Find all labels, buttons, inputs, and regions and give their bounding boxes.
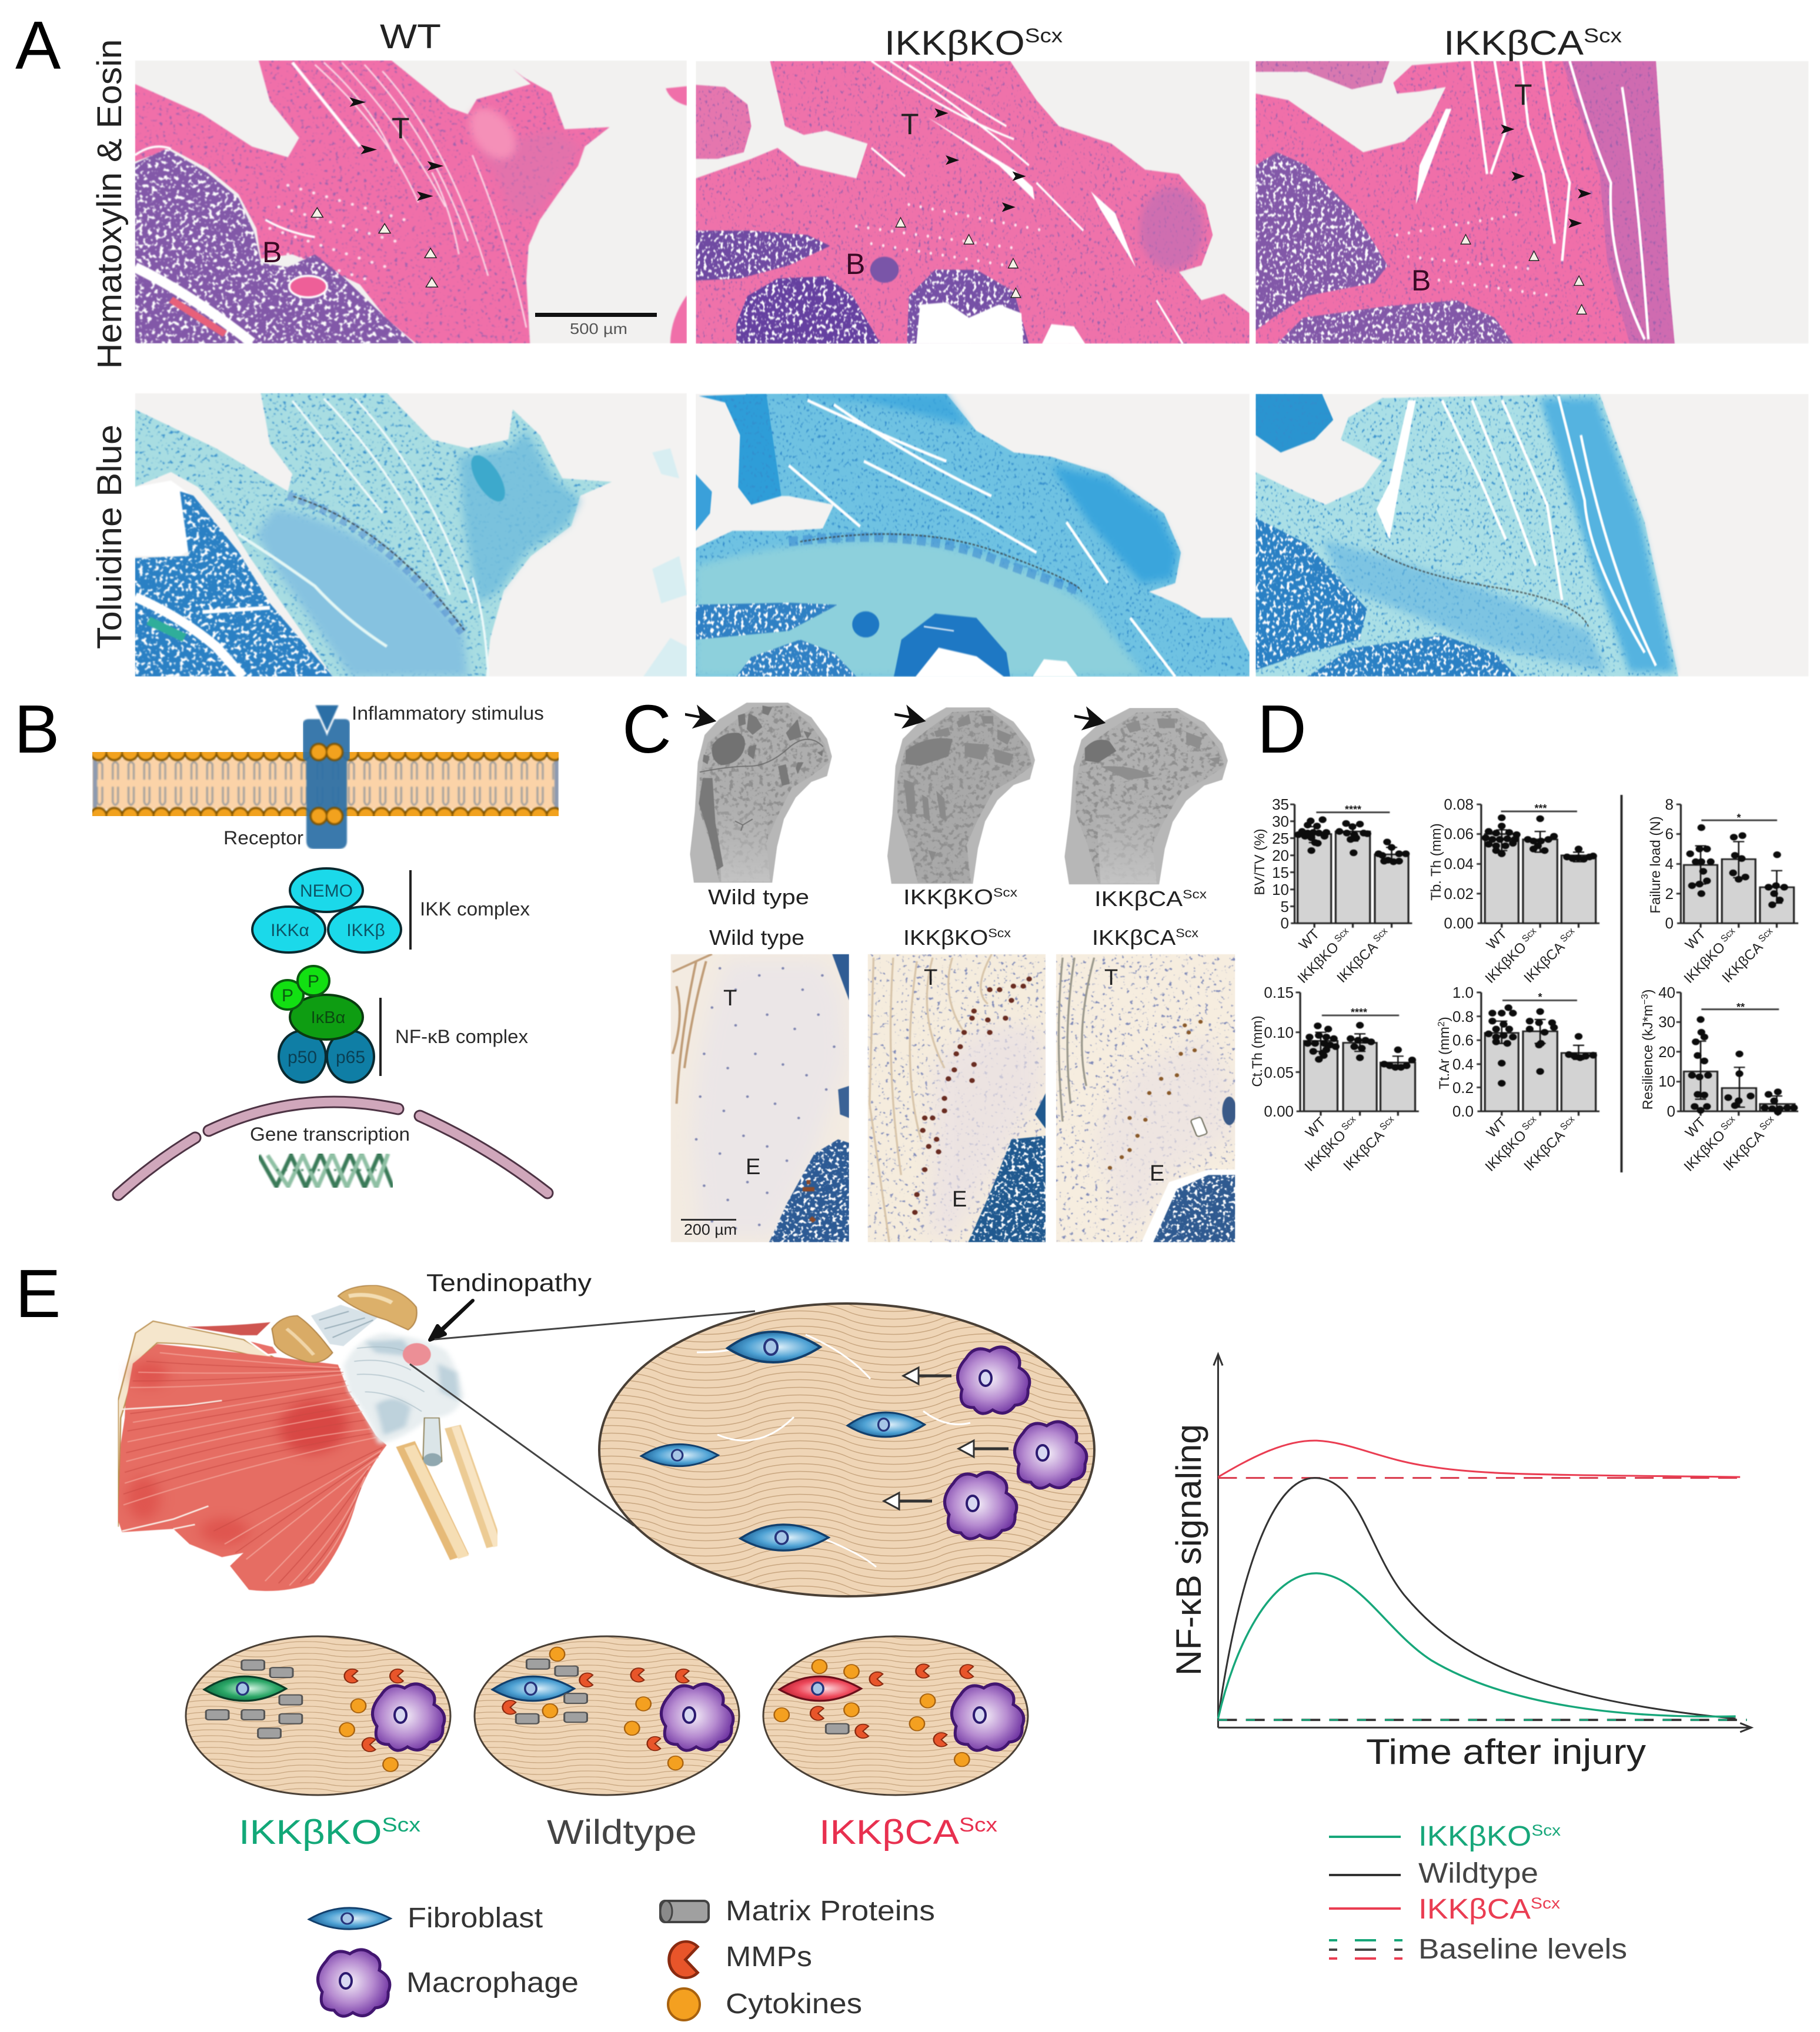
white arrowheads xyxy=(311,208,438,287)
x category labels: IKKβKO xyxy=(1295,939,1342,987)
x category labels: IKKβKO xyxy=(1482,939,1530,987)
cell membrane bilayer xyxy=(92,752,559,816)
IKK complex: IKKα xyxy=(271,921,309,940)
y tick labels: 10 xyxy=(1272,881,1289,898)
y axis titles: Resilience (kJ*m xyxy=(1640,1005,1656,1109)
y tick labels: 0 xyxy=(1665,914,1674,932)
white arrowheads xyxy=(1461,235,1587,314)
chart legend: Scx xyxy=(1531,1822,1561,1839)
row labels lower: IKKβKO xyxy=(903,925,980,950)
H&E KO micrograph xyxy=(696,61,1250,344)
rotator tendon xyxy=(343,1333,463,1444)
black arrowheads xyxy=(935,108,1026,212)
significance stars: * xyxy=(1736,812,1741,824)
x category labels: Scx xyxy=(1756,1114,1776,1134)
y axis titles: ) xyxy=(1640,990,1656,994)
y tick labels: 6 xyxy=(1665,825,1674,843)
Toluidine WT micrograph xyxy=(135,393,687,677)
y tick labels: 0.2 xyxy=(1452,1079,1474,1097)
macrophages xyxy=(944,1347,1087,1539)
genotype labels: Scx xyxy=(959,1814,997,1836)
x category labels: Scx xyxy=(1557,926,1577,946)
panel letter E: E xyxy=(15,1255,61,1332)
y tick labels: 0.8 xyxy=(1452,1008,1474,1025)
y tick labels: 0.00 xyxy=(1444,914,1474,932)
IKK complex xyxy=(252,868,530,952)
legend: cell types: Fibroblast xyxy=(408,1903,543,1934)
labels T and E: T xyxy=(1104,965,1118,990)
magnified tendon ellipse xyxy=(599,1304,1094,1596)
chart legend: Baseline levels xyxy=(1418,1934,1627,1965)
y tick labels: 1.0 xyxy=(1452,984,1474,1001)
panel letter A: A xyxy=(15,7,61,83)
bars xyxy=(1298,831,1795,1111)
genotype labels: IKKβKO xyxy=(239,1813,363,1851)
y tick labels: 0 xyxy=(1667,1102,1675,1120)
y axis title: NF-κB signaling xyxy=(1169,1424,1208,1676)
x category labels: WT xyxy=(1484,926,1510,953)
IHC images xyxy=(670,954,1237,1242)
column heading IKKβKO Scx: IKKβKO xyxy=(884,24,1008,62)
y tick labels: 0.00 xyxy=(1264,1102,1294,1120)
T label: T xyxy=(901,108,919,141)
chart legend: Scx xyxy=(1531,1894,1561,1912)
IKKβKO curve xyxy=(1218,1573,1736,1719)
legend: molecules: Matrix Proteins xyxy=(726,1896,935,1927)
panel B: NF-κB pathway xyxy=(14,691,559,1195)
scale bar 200 µm: 200 µm xyxy=(684,1221,737,1238)
y axis titles: BV/TV (%) xyxy=(1252,828,1268,895)
y tick labels: 0.6 xyxy=(1452,1031,1474,1049)
y tick labels: 0.05 xyxy=(1264,1064,1294,1081)
row labels upper: Scx xyxy=(993,886,1018,900)
y tick labels: 0.10 xyxy=(1264,1024,1294,1041)
x category labels: IKKβKO xyxy=(1681,939,1728,987)
bone wild type xyxy=(690,703,832,883)
x category labels: IKKβCA xyxy=(1719,939,1766,986)
receptor xyxy=(303,704,350,849)
x category labels: IKKβKO xyxy=(1681,1127,1728,1175)
matrix proteins, MMPs and cytokines in ellipses xyxy=(206,1647,973,1772)
IHC wild type xyxy=(670,954,849,1242)
row labels lower xyxy=(709,925,1199,950)
panel letter B: B xyxy=(14,691,59,767)
y tick labels: 30 xyxy=(1658,1013,1675,1031)
white arrowheads xyxy=(896,218,1021,298)
row label Toluidine Blue: Toluidine Blue xyxy=(91,425,129,649)
genotype labels: Wildtype xyxy=(547,1813,697,1851)
labels T and E: T xyxy=(723,986,737,1011)
x category labels: IKKβKO xyxy=(1302,1127,1349,1175)
genotype labels: IKKβCA xyxy=(819,1813,941,1851)
muscle fibres xyxy=(123,1353,381,1585)
label inflammatory stimulus: Inflammatory stimulus xyxy=(352,703,544,724)
x category labels: IKKβCA xyxy=(1720,1127,1767,1174)
H&E WT micrograph xyxy=(135,61,687,343)
labels T and E xyxy=(723,965,1164,1212)
scale bar 500 µm: 500 µm xyxy=(570,320,627,337)
panel C: micro CT and IHC xyxy=(622,691,1237,1242)
x category labels: Scx xyxy=(1557,1114,1577,1134)
B label: B xyxy=(262,236,282,269)
IKK complex: IKKβ xyxy=(346,921,385,940)
micro CT bones xyxy=(685,703,1228,884)
IHC IKKβCA xyxy=(1056,954,1237,1242)
NF-κB complex: P xyxy=(308,972,319,991)
y axis titles: −3 xyxy=(1640,994,1650,1005)
y axis titles: Ct.Th (mm) xyxy=(1250,1015,1265,1087)
divider xyxy=(1621,795,1622,1172)
y tick labels: 15 xyxy=(1272,864,1289,881)
significance stars: **** xyxy=(1345,804,1361,816)
x category labels: Scx xyxy=(1518,926,1538,946)
NF-κB complex: NF-κB complex xyxy=(395,1026,528,1047)
x category labels: Scx xyxy=(1755,926,1775,946)
x category labels: WT xyxy=(1682,1114,1709,1141)
significance stars: *** xyxy=(1534,803,1547,814)
row label Hematoxylin and Eosin: Hematoxylin & Eosin xyxy=(91,39,129,369)
legend: molecules: MMPs xyxy=(726,1941,812,1973)
arrows xyxy=(685,704,1106,730)
biceps tendon xyxy=(423,1418,442,1464)
y tick labels: 20 xyxy=(1272,847,1289,864)
column heading WT: WT xyxy=(380,18,441,56)
NF-κB complex xyxy=(272,966,528,1082)
x category labels: Scx xyxy=(1338,1114,1358,1134)
icon: DNA helix xyxy=(259,1154,393,1188)
Toluidine KO micrograph xyxy=(696,394,1250,677)
y tick labels: 4 xyxy=(1665,855,1674,873)
ligament xyxy=(311,1305,379,1346)
column heading IKKβKO Scx: Scx xyxy=(1025,25,1063,47)
y tick labels: 40 xyxy=(1658,984,1675,1001)
x category labels: Scx xyxy=(1518,1114,1538,1134)
y tick labels: 25 xyxy=(1272,830,1289,847)
x category labels: Scx xyxy=(1717,1114,1737,1134)
significance stars: * xyxy=(1538,991,1542,1003)
row labels upper: IKKβCA xyxy=(1094,887,1170,911)
significance stars: **** xyxy=(1351,1007,1367,1018)
panel letter D: D xyxy=(1257,691,1307,767)
x category labels: Scx xyxy=(1717,926,1737,946)
zoom lines xyxy=(410,1311,755,1526)
black arrowheads xyxy=(1501,125,1591,228)
muscle body xyxy=(118,1344,386,1591)
fibroblasts xyxy=(641,1332,924,1550)
row labels upper: IKKβKO xyxy=(903,885,980,909)
x category labels: IKKβCA xyxy=(1334,939,1381,986)
labels T and E: E xyxy=(746,1155,760,1179)
scale bar 500 µm xyxy=(535,313,657,337)
y axis titles: Tt.Ar (mm xyxy=(1437,1027,1452,1089)
y tick labels: 8 xyxy=(1665,796,1674,813)
x category labels: Scx xyxy=(1370,926,1390,946)
y tick labels: 2 xyxy=(1665,885,1674,903)
Toluidine CA micrograph xyxy=(1255,394,1809,677)
y axis titles: ) xyxy=(1437,1017,1452,1021)
tendinopathy spot xyxy=(403,1343,431,1366)
column heading IKKβCA Scx: IKKβCA xyxy=(1444,24,1565,62)
IKK complex: IKK complex xyxy=(420,898,530,920)
bone IKKβCA xyxy=(1064,708,1228,884)
NF-κB complex: p65 xyxy=(336,1048,365,1067)
labels T and E: E xyxy=(952,1187,967,1212)
y tick labels: 35 xyxy=(1272,796,1289,813)
labels T and E: T xyxy=(924,965,937,990)
panel D: bar charts xyxy=(1250,691,1798,1175)
acromion and coracoid xyxy=(338,1285,417,1330)
row labels upper xyxy=(708,885,1207,911)
panel A: histology xyxy=(15,7,1809,677)
row labels upper: Wild type xyxy=(708,885,809,909)
x category labels: WT xyxy=(1682,926,1709,953)
NF-κB complex: p50 xyxy=(288,1048,317,1067)
line chart: NF-κB signaling over time xyxy=(1214,1354,1751,1732)
row labels lower: Scx xyxy=(988,927,1011,940)
x category labels xyxy=(1295,926,1780,1175)
chart legend: Wildtype xyxy=(1418,1858,1538,1889)
x category labels: IKKβKO xyxy=(1482,1127,1530,1175)
x category labels: WT xyxy=(1296,926,1323,953)
baseline dashes xyxy=(1218,1477,1742,1479)
label gene transcription: Gene transcription xyxy=(250,1124,410,1145)
y axis titles: 2 xyxy=(1437,1021,1447,1027)
tissue ellipse wildtype xyxy=(475,1636,739,1795)
y axis titles: Tb. Th (mm) xyxy=(1428,823,1444,901)
scapula edge xyxy=(118,1321,273,1527)
panel letter C: C xyxy=(622,691,672,767)
y axis titles xyxy=(1250,816,1664,1109)
axes xyxy=(1214,1354,1751,1732)
tissue ellipse IKKβCA xyxy=(763,1636,1028,1795)
black arrowheads xyxy=(349,98,443,201)
NF-κB complex: IκBα xyxy=(311,1008,345,1027)
labels T and E: E xyxy=(1150,1161,1164,1186)
row labels lower: Wild type xyxy=(709,925,804,950)
genotype labels xyxy=(239,1813,997,1851)
y tick labels: 20 xyxy=(1658,1043,1675,1061)
y tick labels: 10 xyxy=(1658,1072,1675,1090)
NF-κB complex: P xyxy=(282,986,293,1005)
x category labels: IKKβCA xyxy=(1521,939,1568,986)
y tick labels: 0.08 xyxy=(1444,796,1474,813)
x category labels: IKKβCA xyxy=(1521,1127,1568,1174)
H&E CA micrograph xyxy=(1255,61,1809,344)
label receptor: Receptor xyxy=(223,827,303,848)
y tick labels: 0.02 xyxy=(1444,885,1474,903)
y axis titles: Failure load (N) xyxy=(1648,816,1664,914)
IKKβCA curve xyxy=(1218,1441,1740,1477)
y tick labels: 0.04 xyxy=(1444,855,1474,873)
x axis title: Time after injury xyxy=(1366,1732,1646,1772)
genotype labels: Scx xyxy=(382,1814,420,1836)
legend: molecules: Cytokines xyxy=(726,1988,862,2020)
humerus xyxy=(405,1426,497,1557)
T label: T xyxy=(1514,78,1532,111)
x category labels: WT xyxy=(1484,1114,1510,1141)
label tendinopathy: Tendinopathy xyxy=(426,1269,592,1296)
row labels lower: Scx xyxy=(1176,927,1199,940)
B label: B xyxy=(846,248,865,280)
nuclear envelope xyxy=(118,1102,547,1195)
data points xyxy=(1298,818,1794,1112)
y tick labels xyxy=(1264,796,1675,1120)
IHC IKKβKO xyxy=(867,954,1046,1242)
legend: cell types xyxy=(309,1903,579,2016)
significance stars xyxy=(1345,803,1745,1018)
y tick labels: 0 xyxy=(1281,914,1289,932)
IKK complex: NEMO xyxy=(300,881,353,901)
row labels lower: IKKβCA xyxy=(1092,925,1168,950)
column heading IKKβCA Scx: Scx xyxy=(1584,25,1622,47)
panel E: tendinopathy model xyxy=(15,1255,1751,2020)
x category labels: IKKβCA xyxy=(1340,1127,1387,1174)
chart legend xyxy=(1329,1821,1627,1965)
y tick labels: 5 xyxy=(1281,898,1289,915)
chart legend: IKKβCA xyxy=(1418,1894,1520,1925)
y tick labels: 0.06 xyxy=(1444,825,1474,843)
axes and ticks xyxy=(1290,804,1798,1116)
row labels upper: Scx xyxy=(1183,888,1207,901)
tissue ellipse IKKβKO xyxy=(186,1636,450,1795)
x category labels: WT xyxy=(1303,1114,1329,1141)
T label: T xyxy=(392,112,410,145)
y tick labels: 30 xyxy=(1272,813,1289,830)
x category labels: Scx xyxy=(1376,1114,1396,1134)
x category labels: Scx xyxy=(1331,926,1351,946)
chart legend: IKKβKO xyxy=(1418,1821,1521,1852)
arrow to tendinopathy site xyxy=(430,1301,473,1340)
y tick labels: 0.4 xyxy=(1452,1055,1474,1073)
legend: molecules xyxy=(660,1896,935,2020)
legend: cell types: Macrophage xyxy=(406,1967,579,1998)
migration arrows xyxy=(884,1368,1008,1509)
significance stars: ** xyxy=(1736,1001,1745,1013)
y tick labels: 0.15 xyxy=(1264,984,1294,1001)
y tick labels: 0.0 xyxy=(1452,1102,1474,1120)
illustration: shoulder anatomy xyxy=(118,1285,497,1591)
wildtype curve xyxy=(1218,1478,1736,1719)
bone IKKβKO xyxy=(887,707,1035,884)
significance bars xyxy=(1316,811,1779,1015)
chart marks xyxy=(1290,795,1798,1172)
error bars xyxy=(1309,825,1782,1110)
B label: B xyxy=(1411,264,1431,297)
